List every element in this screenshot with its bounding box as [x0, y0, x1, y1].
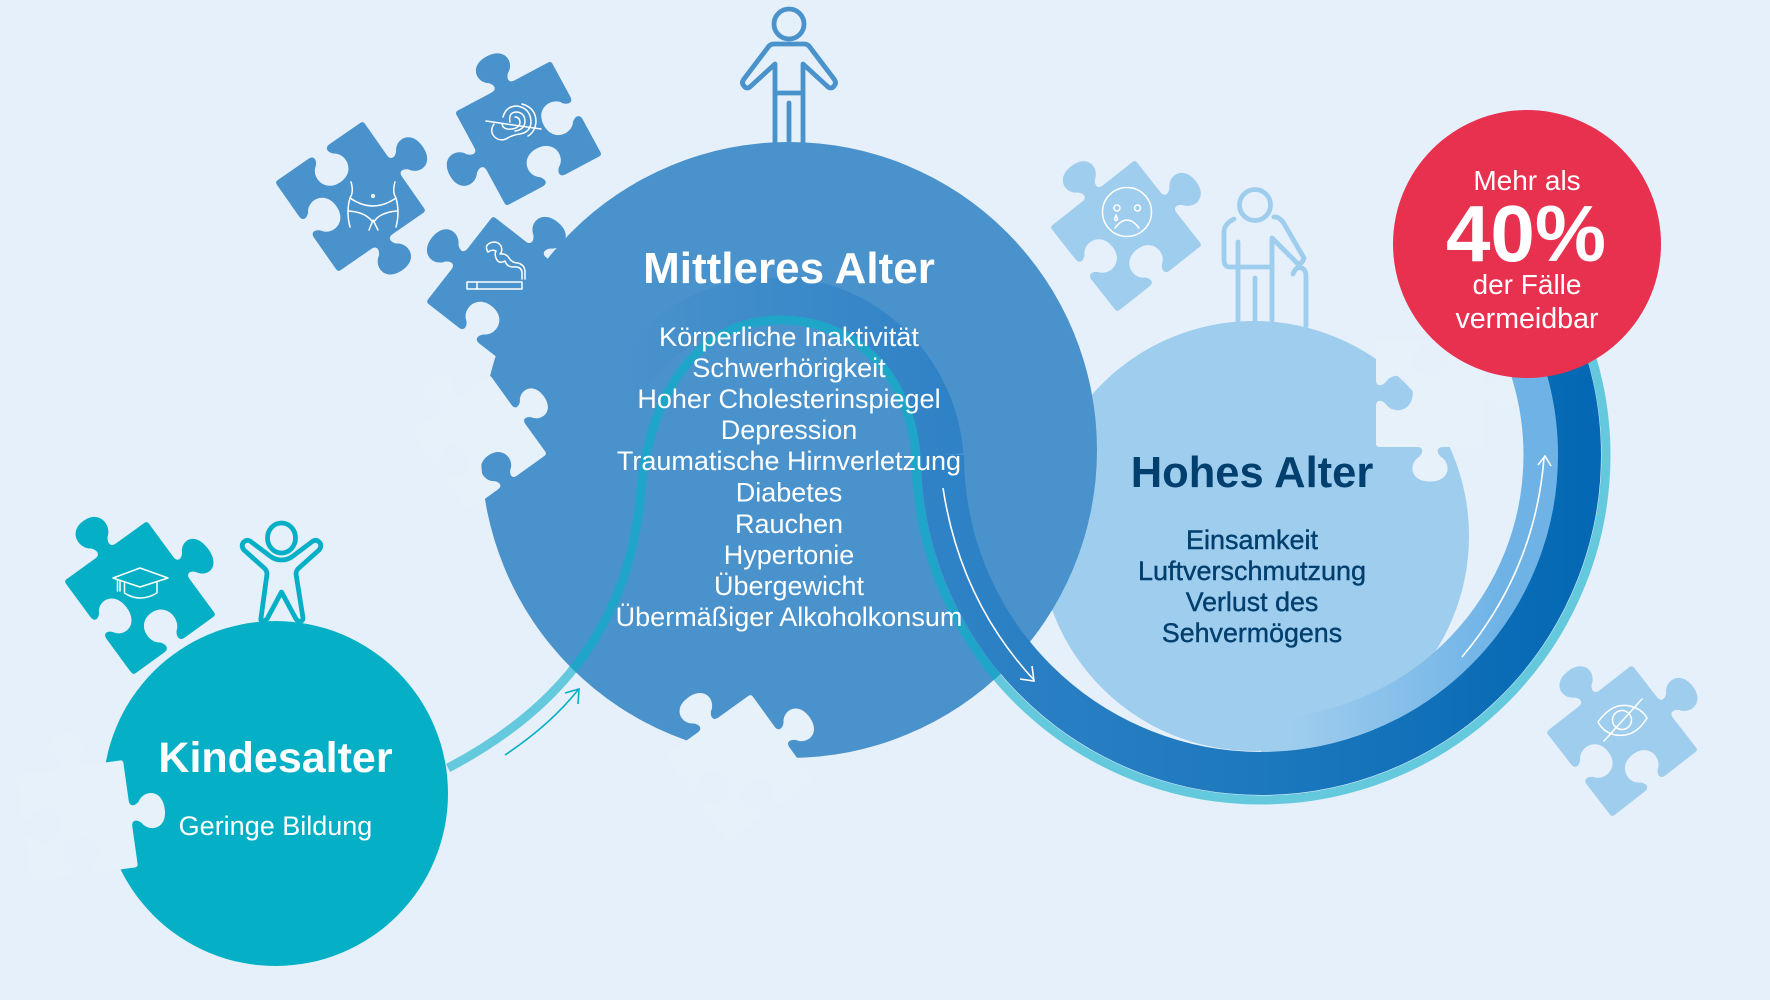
icon: cigarette	[467, 242, 525, 289]
puzzle piece: vision loss	[1525, 616, 1726, 817]
text: childhood: Kindesalter	[158, 734, 393, 782]
circle: middle age	[481, 142, 1097, 758]
teal arch inside middle age circle	[570, 316, 1000, 680]
puzzle cut-out: middle age bottom	[645, 647, 841, 842]
puzzle piece: overweight	[275, 101, 474, 301]
puzzle piece: hearing loss	[408, 31, 602, 222]
teal pathway base	[448, 320, 1606, 800]
text: middle age: Depression	[721, 415, 857, 445]
text: middle age: Übermäßiger Alkoholkonsum	[616, 602, 962, 632]
callout: 40 percent: der Fälle	[1473, 269, 1581, 300]
circle: old age	[1039, 321, 1469, 751]
arrow: rising right side	[1462, 456, 1551, 657]
light inner band	[1261, 362, 1541, 735]
text: childhood: Geringe Bildung	[179, 811, 372, 841]
text: old age: Sehvermögens	[1162, 618, 1342, 648]
person: elderly with cane	[1224, 190, 1306, 326]
puzzle piece: smoking	[398, 167, 600, 369]
text: childhood	[158, 734, 393, 841]
text: old age: Hohes Alter	[1131, 449, 1373, 497]
callout: 40 percent: Mehr als	[1473, 165, 1581, 196]
arch band fading inside middle age circle	[605, 299, 942, 455]
text: middle age	[616, 244, 962, 632]
icon: waist	[348, 182, 398, 230]
person: adult	[742, 9, 836, 143]
text: old age: Verlust des	[1186, 587, 1318, 617]
arrow: childhood to middle age	[505, 689, 579, 755]
icon: graduation cap	[113, 568, 168, 598]
icon: crossed-out ear	[486, 104, 541, 140]
callout: 40 percent: 40%	[1446, 189, 1606, 278]
arrow: middle to old age	[943, 488, 1034, 681]
puzzle cut-out: childhood	[11, 721, 172, 882]
text: old age: Einsamkeit	[1186, 525, 1319, 555]
puzzle cut-out: middle age left	[393, 331, 572, 511]
circle: childhood	[103, 621, 448, 966]
callout: 40 percent	[1393, 110, 1661, 378]
text: middle age: Schwerhörigkeit	[692, 352, 886, 383]
puzzle piece: graduation (childhood)	[42, 472, 243, 675]
text: middle age: Rauchen	[735, 509, 843, 539]
text: old age	[1131, 449, 1373, 648]
text: middle age: Mittleres Alter	[643, 244, 935, 293]
text: middle age: Hypertonie	[724, 540, 854, 570]
text: middle age: Diabetes	[736, 478, 842, 508]
callout: 40 percent: vermeidbar	[1455, 303, 1599, 335]
text: middle age: Hoher Cholesterinspiegel	[637, 384, 941, 414]
puzzle cut-out: old age	[1376, 339, 1519, 482]
text: middle age: Übergewicht	[714, 571, 865, 601]
icon: sad face	[1102, 188, 1152, 236]
text: middle age: Körperliche Inaktivität	[659, 321, 919, 352]
dark U-shaped band	[942, 360, 1580, 774]
puzzle piece: loneliness	[1029, 111, 1229, 312]
person: child	[242, 523, 321, 621]
text: middle age: Traumatische Hirnverletzung	[617, 446, 961, 476]
text: old age: Luftverschmutzung	[1138, 556, 1366, 586]
icon: crossed-out eye	[1598, 699, 1647, 741]
